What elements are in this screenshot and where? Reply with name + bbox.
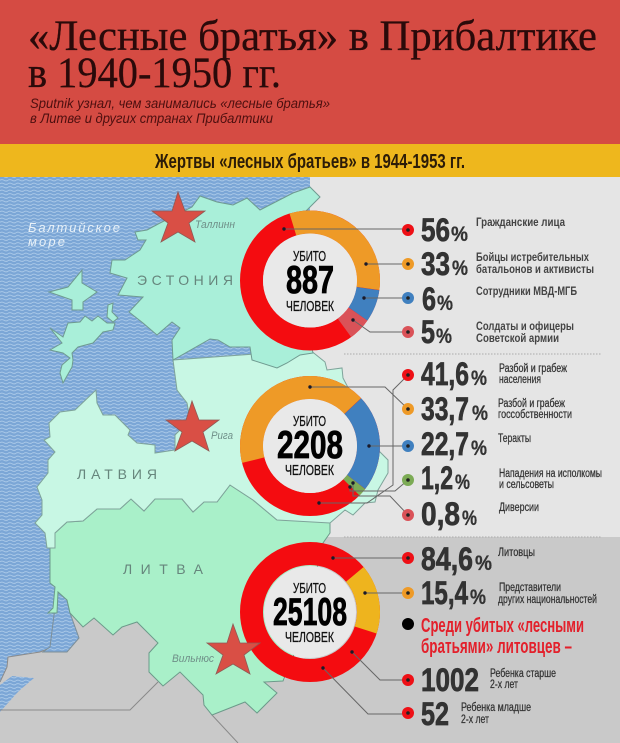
- callout: children killed: [402, 615, 584, 658]
- island: Saaremaa: [50, 316, 115, 383]
- donut: Latvia: УБИТО: [293, 413, 326, 430]
- item: 41,6%: %: [471, 367, 487, 390]
- item: 5%: Солдаты и офицеры: [476, 321, 574, 333]
- title: [28, 13, 597, 97]
- item: 33,7%: [402, 391, 572, 427]
- panel: right background: [0, 177, 620, 743]
- item: 15,4%: 15,4: [421, 575, 468, 611]
- leader lines: [282, 227, 408, 714]
- title: «Лесные братья» в Прибалтике: [28, 13, 597, 60]
- item: 6%: [402, 281, 577, 317]
- item: 33,7%: госсобственности: [498, 409, 572, 421]
- item: 84,6%: Литовцы: [498, 547, 535, 559]
- donut: Lithuania: ЧЕЛОВЕК: [285, 629, 334, 646]
- item: 41,6%: Разбой и грабеж: [499, 363, 567, 375]
- donut: Estonia: 887: [286, 259, 334, 302]
- subtitle: [30, 95, 330, 126]
- item: 0,8%: %: [462, 507, 477, 530]
- item: 52: 52: [421, 696, 449, 732]
- divider dotted: [344, 354, 602, 537]
- title: в 1940-1950 гг.: [28, 50, 281, 97]
- subtitle: Sputnik узнал, чем занимались «лесные братья»: [30, 95, 330, 111]
- legend: Latvia: [402, 356, 602, 532]
- donut: Latvia: 2208: [277, 424, 343, 467]
- header: [0, 0, 620, 144]
- label: Baltic Sea: море: [28, 234, 65, 249]
- donut: Estonia: УБИТО: [293, 248, 326, 265]
- item: 41,6%: [402, 356, 567, 392]
- label: Estonia: ЭСТОНИЯ: [137, 272, 233, 288]
- item: 5%: %: [436, 325, 452, 348]
- item: 56%: Гражданские лица: [476, 217, 566, 229]
- item: 22,7%: Теракты: [498, 433, 531, 445]
- item: 33%: Бойцы истребительных: [476, 252, 589, 264]
- label: Baltic Sea: [28, 220, 120, 249]
- item: 33,7%: 33,7: [421, 391, 469, 427]
- item: 41,6%: 41,6: [421, 356, 469, 392]
- gray land: [0, 592, 340, 743]
- subheading band: [0, 144, 620, 177]
- item: 22,7%: %: [471, 437, 487, 460]
- islet: [107, 303, 118, 322]
- item: 15,4%: %: [470, 586, 486, 609]
- item: 52: Ребенка младше: [461, 702, 531, 714]
- item: 1,2%: [402, 460, 602, 496]
- Estonia: [110, 187, 320, 368]
- label: Latvia: ЛАТВИЯ: [77, 466, 157, 482]
- donut: Estonia: ЧЕЛОВЕК: [286, 298, 334, 315]
- item: 6%: %: [437, 292, 453, 315]
- item: 6%: Сотрудники МВД-МГБ: [476, 286, 577, 298]
- item: 1002: [402, 662, 556, 698]
- item: 52: [402, 696, 531, 732]
- donut: Lithuania: [228, 530, 392, 694]
- donut: Latvia: [227, 363, 393, 529]
- item: 15,4%: Представители: [499, 582, 561, 594]
- icon: star Riga: [166, 401, 219, 451]
- item: 1,2%: 1,2: [421, 460, 453, 496]
- item: 33%: [402, 246, 594, 282]
- lagoon: [43, 592, 79, 652]
- icon: star Vilnius: [207, 624, 260, 674]
- label: Vilnius: Вильнюс: [172, 653, 214, 665]
- island: Hiiumaa: [49, 270, 97, 310]
- panel: map: [0, 177, 388, 743]
- subheading band: Жертвы «лесных братьев» в 1944-1953 гг.: [154, 151, 465, 173]
- item: 6%: 6: [422, 281, 436, 317]
- sea: [0, 177, 310, 743]
- item: 1002: 1002: [421, 662, 479, 698]
- coast line: [0, 648, 50, 682]
- item: 22,7%: [402, 426, 531, 462]
- icon: star Tallinn: [152, 192, 205, 242]
- item: 56%: %: [451, 223, 468, 246]
- legend: Estonia: [402, 212, 594, 350]
- Latvia: [35, 350, 388, 548]
- item: 5%: Советской армии: [476, 333, 559, 345]
- item: 33%: 33: [421, 246, 450, 282]
- item: 22,7%: 22,7: [421, 426, 469, 462]
- legend: Lithuania: [402, 541, 597, 732]
- item: 84,6%: 84,6: [421, 541, 473, 577]
- item: 0,8%: Диверсии: [499, 502, 539, 514]
- donut: Lithuania: 25108: [273, 591, 347, 634]
- subtitle: в Литве и других странах Прибалтики: [30, 110, 273, 126]
- item: 5%: 5: [421, 314, 435, 350]
- donut: Lithuania: УБИТО: [293, 580, 326, 597]
- label: Tallinn: Таллинн: [195, 219, 235, 231]
- donut: Latvia: ЧЕЛОВЕК: [285, 462, 334, 479]
- item: 5%: [402, 314, 574, 350]
- item: 33,7%: Разбой и грабеж: [498, 398, 565, 410]
- item: 0,8%: 0,8: [421, 496, 460, 532]
- lagoon south: [0, 676, 34, 712]
- item: 0,8%: [402, 496, 539, 532]
- label: Riga: Рига: [211, 430, 233, 442]
- item: 52: 2-х лет: [461, 714, 490, 726]
- panel: bottom background: [310, 537, 620, 743]
- item: 33%: %: [452, 257, 468, 280]
- item: 84,6%: %: [475, 552, 492, 575]
- donut: Estonia: [229, 199, 391, 362]
- item: 15,4%: [402, 575, 597, 611]
- Lithuania: [48, 485, 330, 715]
- item: 33%: батальонов и активисты: [476, 264, 594, 276]
- label: Lithuania: ЛИТВА: [123, 561, 204, 577]
- item: 1002: 2-х лет: [490, 679, 519, 691]
- label: Baltic Sea: Балтийское: [28, 220, 120, 235]
- item: 1,2%: и сельсоветы: [499, 479, 554, 491]
- item: 1,2%: %: [455, 471, 470, 494]
- border lines: [0, 682, 238, 743]
- header background: [0, 0, 620, 144]
- item: 56%: 56: [421, 212, 450, 248]
- item: 56%: [402, 212, 566, 248]
- item: 41,6%: населения: [499, 374, 541, 386]
- item: 33,7%: %: [472, 402, 488, 425]
- item: 1002: Ребенка старше: [490, 668, 556, 680]
- item: 84,6%: [402, 541, 535, 577]
